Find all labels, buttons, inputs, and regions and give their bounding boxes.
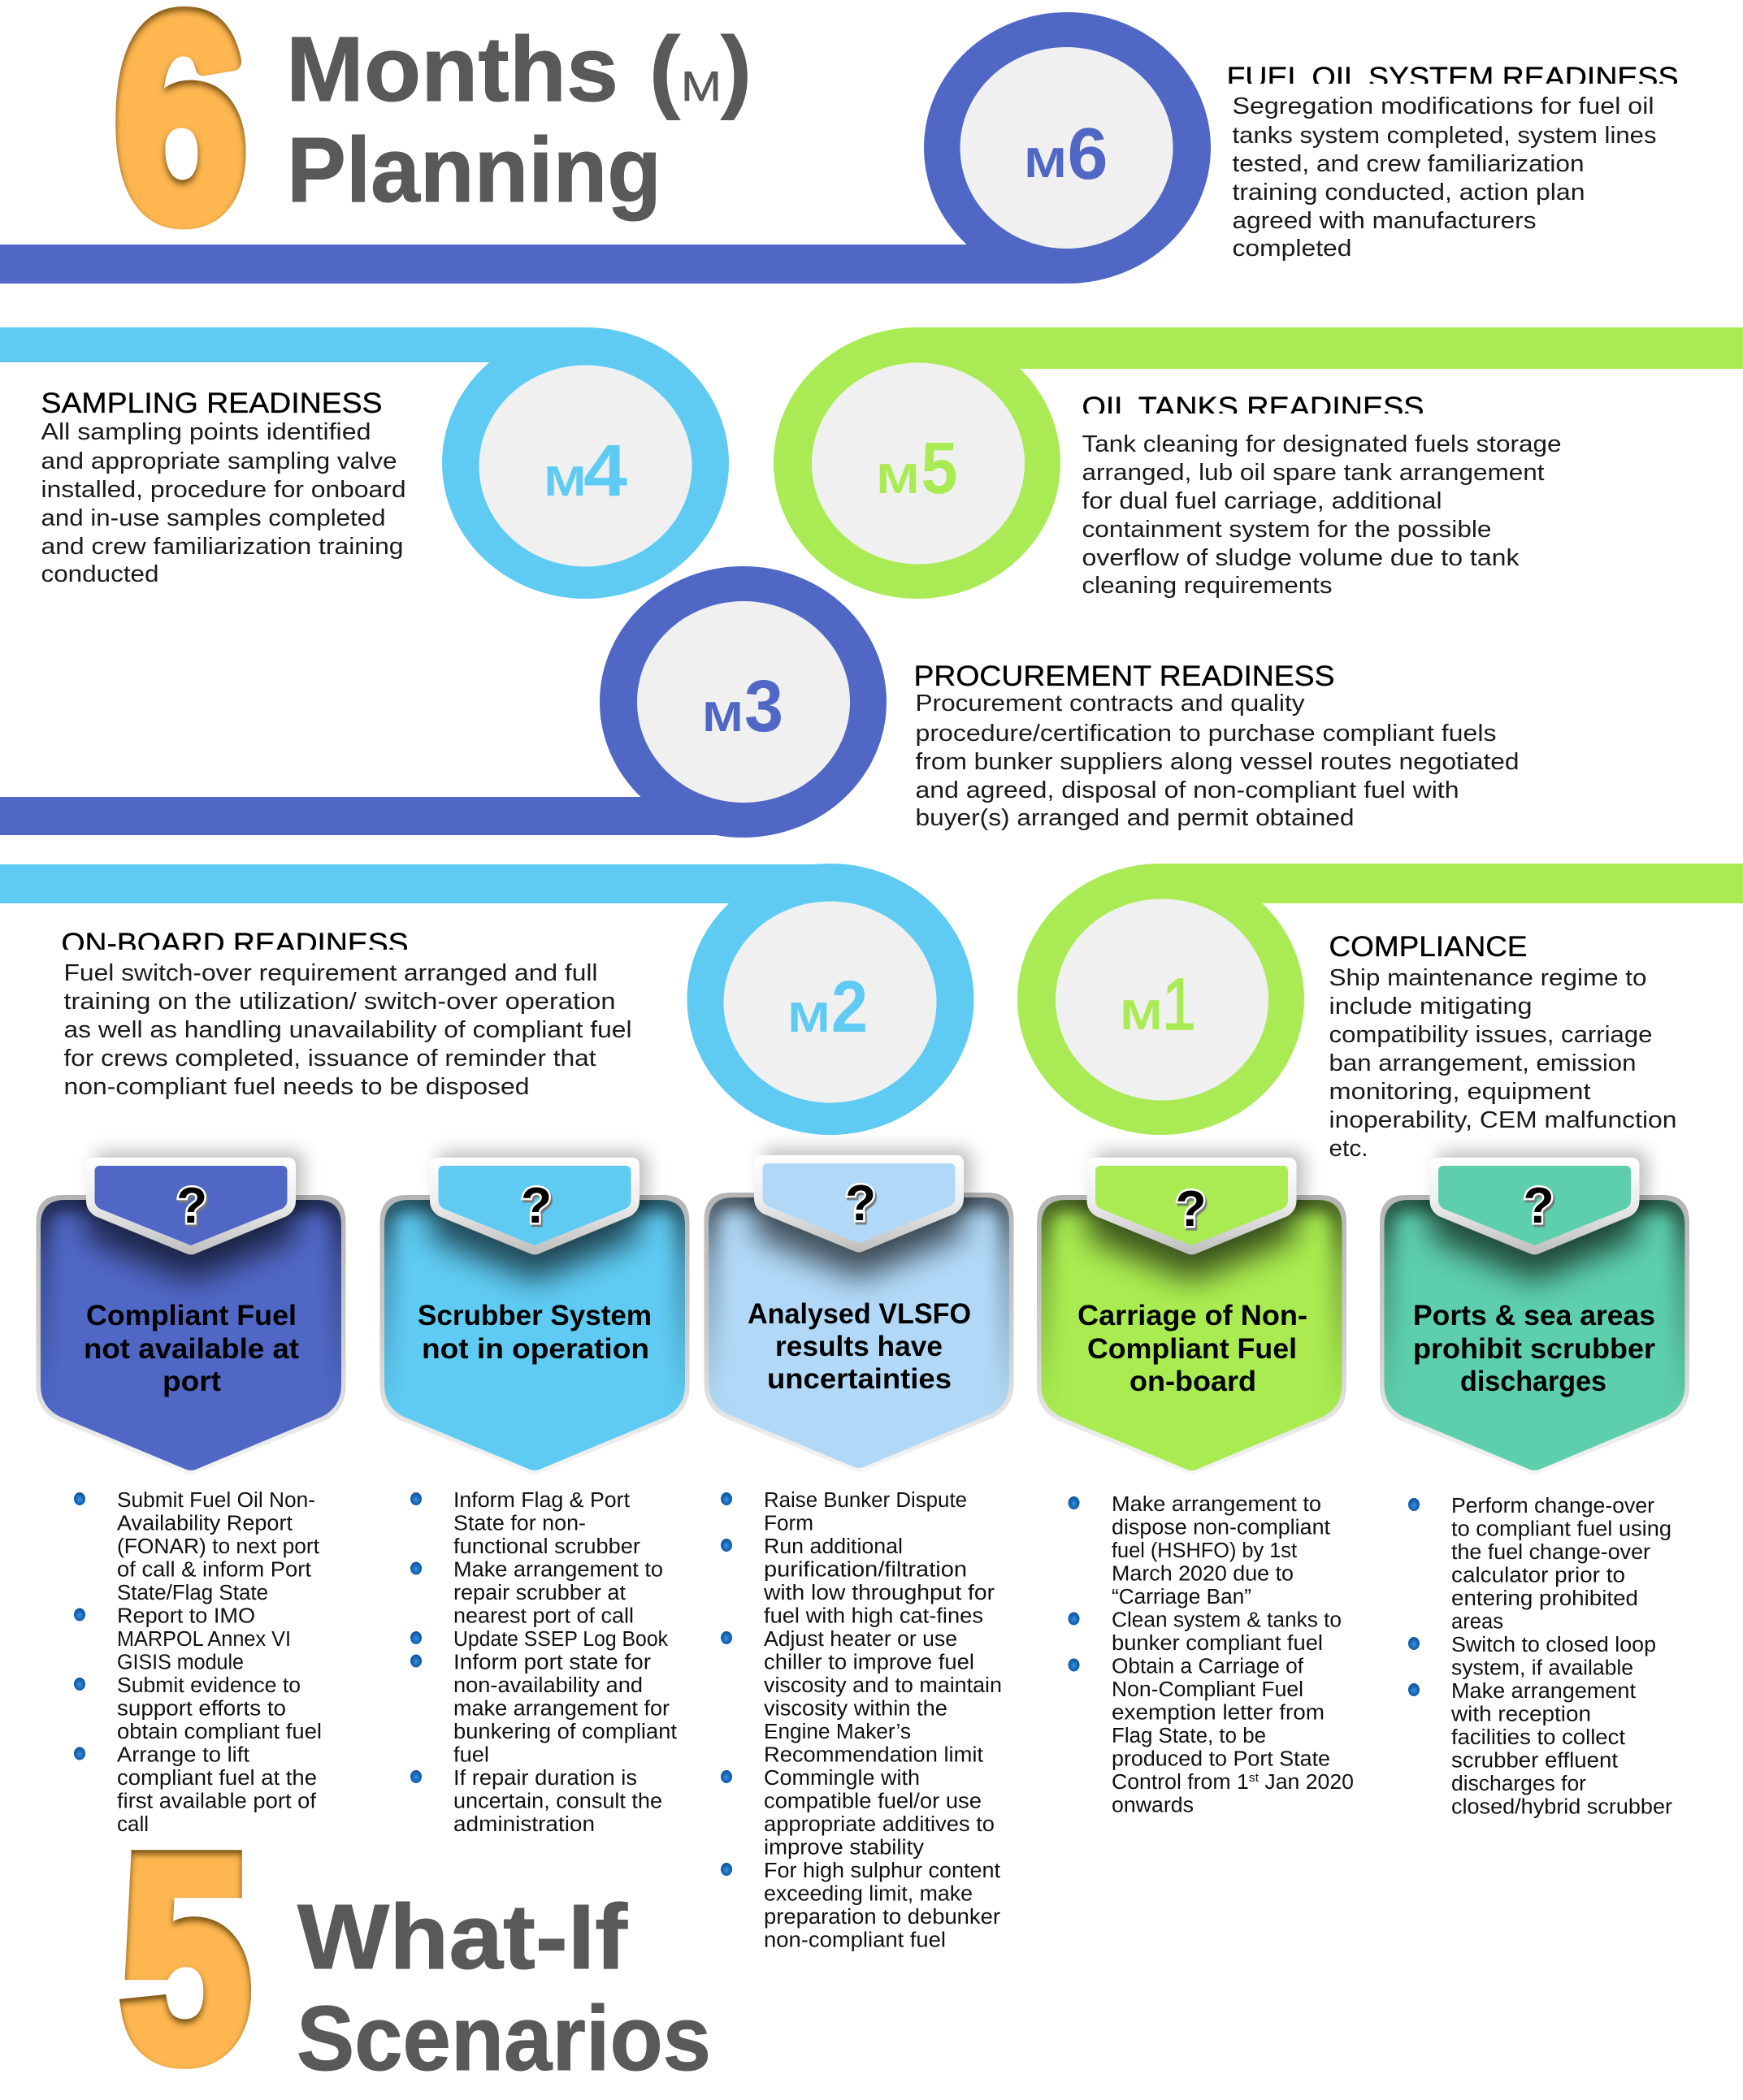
- bullet list 2: Inform Flag & Port: [453, 1489, 630, 1512]
- scenario card 3 heading: Analysed VLSFO: [748, 1298, 971, 1330]
- bullet list 1: Availability Report: [117, 1513, 293, 1535]
- text: sampling readiness: and in-use samples completed: [41, 505, 385, 531]
- text: procurement readiness: and agreed, disposal of non-compliant fuel with: [915, 777, 1459, 803]
- bullet list 5: facilities to collect: [1451, 1726, 1625, 1749]
- bullet list 5: the fuel change-over: [1451, 1541, 1651, 1564]
- text: on-board readiness: training on the utilization/ switch-over operation: [63, 989, 616, 1015]
- bullet list 3: [721, 1489, 1002, 1951]
- text: compliance: Ship maintenance regime to: [1329, 965, 1646, 991]
- bullet list 3: compatible fuel/or use: [764, 1790, 982, 1813]
- bullet list 1: State/Flag State: [117, 1582, 268, 1604]
- bullet list 2: bunkering of compliant: [453, 1721, 677, 1743]
- scenario card 1 heading: [84, 1300, 299, 1397]
- bullet list 2: make arrangement for: [453, 1698, 670, 1721]
- timeline M4 ring: [0, 327, 729, 599]
- scenario card 5 heading: [1413, 1300, 1655, 1397]
- bullet list 4: st: [1249, 1771, 1260, 1785]
- bullet list 1: Report to IMO: [117, 1605, 255, 1628]
- timeline M5 ring: [774, 327, 1743, 599]
- bullet list 5: Make arrangement: [1451, 1680, 1636, 1703]
- bullet list 1: GISIS module: [117, 1651, 244, 1674]
- bullet list 3: Raise Bunker Dispute: [764, 1489, 967, 1512]
- bullet list 2: fuel: [453, 1743, 489, 1766]
- bullet list 1: [74, 1489, 322, 1836]
- bullet list 4: March 2020 due to: [1112, 1563, 1294, 1586]
- scenario card 1 heading: port: [163, 1366, 221, 1397]
- bullet list 2: non-availability and: [453, 1674, 643, 1697]
- text: fuel oil system readiness: FUEL OIL SYSTEM READINESS: [1227, 62, 1679, 93]
- text: sampling readiness: All sampling points identified: [41, 419, 371, 445]
- text: oil tanks readiness: containment system for the possible: [1082, 517, 1492, 543]
- scenario card 1: [36, 1151, 346, 1474]
- bullet list 5: to compliant fuel using: [1451, 1518, 1671, 1540]
- title: Months (M) Planning: M: [681, 63, 722, 110]
- scenario card 1 heading: Compliant Fuel: [86, 1300, 297, 1331]
- title: Months (M) Planning: [286, 18, 752, 221]
- scenario card 3: ?: [845, 1176, 876, 1232]
- title: Months (M) Planning: Months: [286, 18, 618, 120]
- bullet list 3: chiller to improve fuel: [764, 1651, 974, 1674]
- bullet list 4: Flag State, to be: [1112, 1725, 1266, 1747]
- text: fuel oil system readiness: [1227, 62, 1679, 262]
- title: Months (M) Planning: (: [649, 18, 680, 120]
- bullet list 5: entering prohibited: [1451, 1587, 1638, 1610]
- text: procurement readiness: buyer(s) arranged and permit obtained: [915, 805, 1354, 831]
- bullet list 2: repair scrubber at: [453, 1582, 626, 1604]
- text: compliance: ban arrangement, emission: [1329, 1050, 1637, 1076]
- text: procurement readiness: PROCUREMENT READINESS: [913, 660, 1334, 692]
- bullet list 3: exceeding limit, make: [764, 1883, 973, 1906]
- timeline M2 ring: M: [788, 994, 830, 1041]
- text: sampling readiness: installed, procedure for onboard: [41, 477, 406, 503]
- scenario card 2 heading: Scrubber System: [418, 1300, 652, 1331]
- bullet list 3: Form: [764, 1513, 813, 1535]
- bullet list 3: Commingle with: [764, 1767, 920, 1790]
- bullet list 3: Run additional: [764, 1535, 903, 1558]
- bullet list 4: produced to Port State: [1112, 1748, 1330, 1771]
- text: oil tanks readiness: [1082, 392, 1562, 599]
- text: compliance: etc.: [1329, 1136, 1368, 1162]
- text: oil tanks readiness: arranged, lub oil spare tank arrangement: [1082, 460, 1544, 486]
- bullet list 5: calculator prior to: [1451, 1565, 1625, 1587]
- timeline M2 ring: [0, 864, 973, 1135]
- bullet list 1: Arrange to lift: [117, 1743, 249, 1766]
- bullet list 2: Update SSEP Log Book: [453, 1628, 668, 1651]
- bullet list 4: “Carriage Ban”: [1112, 1586, 1251, 1609]
- bullet list 5: scrubber effluent: [1451, 1750, 1618, 1773]
- text: on-board readiness: Fuel switch-over requirement arranged and full: [63, 960, 598, 986]
- text: compliance: compatibility issues, carriage: [1329, 1022, 1653, 1048]
- text: fuel oil system readiness: agreed with manufacturers: [1232, 208, 1536, 234]
- bullet list 4: exemption letter from: [1112, 1701, 1325, 1724]
- bullet list 5: closed/hybrid scrubber: [1451, 1795, 1673, 1818]
- text: sampling readiness: and crew familiarization training: [41, 534, 403, 560]
- bullet list 4: dispose non-compliant: [1112, 1516, 1330, 1539]
- scenario card 5 heading: prohibit scrubber: [1413, 1333, 1655, 1365]
- title: Months (M) Planning: ): [721, 18, 752, 120]
- bullet list 3: non-compliant fuel: [764, 1929, 946, 1951]
- timeline M6 ring: [0, 12, 1211, 284]
- timeline M3 ring: 3: [744, 666, 783, 747]
- bullet list 3: with low throughput for: [763, 1582, 995, 1604]
- timeline M1 ring: 1: [1162, 964, 1196, 1046]
- bullet list 2: Make arrangement to: [453, 1558, 663, 1581]
- title: What-If Scenarios: What-If: [297, 1886, 627, 1988]
- text: oil tanks readiness: for dual fuel carriage, additional: [1082, 488, 1442, 514]
- bullet list 1: MARPOL Annex VI: [117, 1628, 291, 1651]
- bullet list 2: Inform port state for: [453, 1651, 652, 1674]
- timeline M2 ring: 2: [831, 967, 868, 1048]
- bullet list 1: call: [117, 1813, 149, 1836]
- timeline M5 ring: M: [876, 456, 920, 503]
- scenario card 2: [380, 1151, 689, 1474]
- timeline M3 ring: [0, 566, 887, 838]
- scenario card 1: ?: [176, 1178, 207, 1234]
- bullet list 2: State for non-: [453, 1513, 586, 1535]
- text: fuel oil system readiness: tanks system completed, system lines: [1232, 123, 1656, 149]
- scenario card 4 heading: Carriage of Non-: [1077, 1300, 1307, 1331]
- bullet list 3: purification/filtration: [764, 1558, 967, 1581]
- bullet list 4: bunker compliant fuel: [1112, 1632, 1323, 1655]
- bullet list 2: functional scrubber: [453, 1535, 641, 1558]
- text: compliance: [1329, 931, 1677, 1162]
- timeline M4 ring: 4: [583, 431, 627, 512]
- timeline M3 ring: M: [702, 694, 743, 741]
- scenario card 4 heading: Compliant Fuel: [1087, 1333, 1297, 1365]
- bullet list 3: fuel with high cat-fines: [764, 1605, 983, 1628]
- bullet list 4: fuel (HSHFO) by 1st: [1112, 1539, 1297, 1562]
- bullet list 5: areas: [1451, 1610, 1503, 1633]
- bullet list 5: [1408, 1495, 1673, 1818]
- text: fuel oil system readiness: Segregation modifications for fuel oil: [1232, 93, 1654, 119]
- text: on-board readiness: [62, 928, 632, 1100]
- timeline M1 ring: [1017, 864, 1743, 1135]
- bullet list 1: first available port of: [117, 1790, 317, 1813]
- title: Months (M) Planning: Planning: [287, 119, 661, 221]
- scenario card 4: [1037, 1151, 1346, 1474]
- bullet list 4: Non-Compliant Fuel: [1112, 1678, 1303, 1701]
- text: procurement readiness: Procurement contracts and quality: [915, 691, 1305, 717]
- title: What-If Scenarios: [297, 1886, 711, 2089]
- text: on-board readiness: as well as handling unavailability of compliant fuel: [63, 1017, 632, 1043]
- text: oil tanks readiness: cleaning requirements: [1082, 573, 1333, 599]
- text: fuel oil system readiness: completed: [1232, 236, 1352, 262]
- bullet list 1: obtain compliant fuel: [117, 1721, 322, 1743]
- bullet list 4: Control from 1: [1112, 1771, 1243, 1794]
- bullet list 4: Jan 2020: [1259, 1771, 1354, 1794]
- text: compliance: include mitigating: [1329, 994, 1533, 1020]
- timeline M4 ring: M: [544, 458, 587, 505]
- timeline M1 ring: M: [1120, 992, 1162, 1039]
- bullet list 3: Recommendation limit: [764, 1743, 983, 1766]
- bullet list 4: onwards: [1112, 1794, 1194, 1816]
- text: on-board readiness: non-compliant fuel needs to be disposed: [63, 1074, 530, 1100]
- title: What-If Scenarios: Scenarios: [297, 1987, 711, 2089]
- text: sampling readiness: [41, 388, 406, 587]
- scenario card 2 heading: not in operation: [422, 1333, 649, 1365]
- bullet list 2: uncertain, consult the: [453, 1790, 662, 1813]
- bullet list 3: preparation to debunker: [764, 1906, 1001, 1929]
- bullet list 2: If repair duration is: [453, 1767, 637, 1790]
- scenario card 5 heading: Ports & sea areas: [1413, 1300, 1655, 1331]
- bullet list 3: For high sulphur content: [764, 1860, 1000, 1882]
- scenario card 3: [704, 1149, 1014, 1472]
- scenario card 3 heading: uncertainties: [767, 1363, 952, 1395]
- bullet list 3: Adjust heater or use: [764, 1628, 957, 1651]
- bullet list 1: compliant fuel at the: [117, 1767, 317, 1790]
- scenario card 5: ?: [1524, 1178, 1554, 1234]
- bullet list 4: Make arrangement to: [1112, 1493, 1321, 1516]
- text: procurement readiness: procedure/certification to purchase compliant fuels: [915, 721, 1497, 747]
- bullet list 5: with reception: [1450, 1703, 1591, 1725]
- bullet list 4: [1068, 1493, 1354, 1816]
- bullet list 1: Submit evidence to: [117, 1674, 301, 1697]
- bullet list 4: Clean system & tanks to: [1112, 1609, 1342, 1631]
- bullet list 3: viscosity and to maintain: [764, 1674, 1002, 1697]
- timeline M6 ring: M: [1024, 140, 1066, 187]
- bullet list 3: appropriate additives to: [764, 1813, 995, 1836]
- bullet list 1: support efforts to: [117, 1698, 286, 1721]
- text: fuel oil system readiness: tested, and crew familiarization: [1232, 151, 1585, 177]
- bullet list 1: Submit Fuel Oil Non-: [117, 1489, 315, 1512]
- scenario card 2 heading: [418, 1300, 652, 1365]
- bullet list 1: of call & inform Port: [117, 1558, 311, 1581]
- scenario card 4 heading: on-board: [1129, 1366, 1256, 1397]
- bullet list 2: [410, 1489, 677, 1836]
- text: procurement readiness: from bunker suppliers along vessel routes negotiated: [915, 749, 1520, 775]
- text: oil tanks readiness: OIL TANKS READINESS: [1082, 392, 1424, 423]
- scenario card 1 heading: not available at: [84, 1333, 299, 1365]
- scenario card 3 heading: results have: [775, 1331, 943, 1362]
- scenario card 3 heading: [748, 1298, 971, 1395]
- text: compliance: inoperability, CEM malfunction: [1329, 1107, 1677, 1133]
- bullet list 5: system, if available: [1451, 1657, 1633, 1680]
- text: procurement readiness: [913, 660, 1520, 831]
- text: compliance: monitoring, equipment: [1329, 1079, 1591, 1105]
- bullet list 4: Obtain a Carriage of: [1112, 1656, 1304, 1678]
- text: sampling readiness: conducted: [41, 561, 159, 587]
- bullet list 3: Engine Maker’s: [764, 1721, 911, 1743]
- bullet list 1: (FONAR) to next port: [117, 1535, 319, 1558]
- scenario card 5: [1380, 1151, 1689, 1474]
- text: compliance: COMPLIANCE: [1329, 931, 1528, 963]
- text: oil tanks readiness: overflow of sludge volume due to tank: [1082, 545, 1520, 571]
- bullet list 5: Perform change-over: [1451, 1495, 1655, 1518]
- bullet list 3: viscosity within the: [764, 1698, 947, 1721]
- bullet list 5: discharges for: [1451, 1773, 1587, 1795]
- text: sampling readiness: and appropriate sampling valve: [41, 448, 397, 474]
- text: sampling readiness: SAMPLING READINESS: [41, 388, 382, 419]
- bullet list 5: Switch to closed loop: [1451, 1634, 1656, 1656]
- bullet list 2: administration: [453, 1813, 595, 1836]
- text: on-board readiness: ON-BOARD READINESS: [62, 928, 408, 959]
- timeline M6 ring: 6: [1068, 114, 1108, 195]
- text: fuel oil system readiness: training conducted, action plan: [1232, 180, 1585, 206]
- text: on-board readiness: for crews completed, issuance of reminder that: [63, 1046, 596, 1072]
- bullet list 2: nearest port of call: [453, 1605, 634, 1628]
- timeline M5 ring: 5: [921, 428, 957, 509]
- scenario card 4 heading: [1077, 1300, 1307, 1397]
- scenario card 5 heading: discharges: [1460, 1366, 1606, 1397]
- text: oil tanks readiness: Tank cleaning for designated fuels storage: [1082, 431, 1562, 457]
- scenario card 2: ?: [521, 1178, 552, 1234]
- bullet list 3: improve stability: [764, 1836, 924, 1859]
- scenario card 4: ?: [1176, 1181, 1206, 1237]
